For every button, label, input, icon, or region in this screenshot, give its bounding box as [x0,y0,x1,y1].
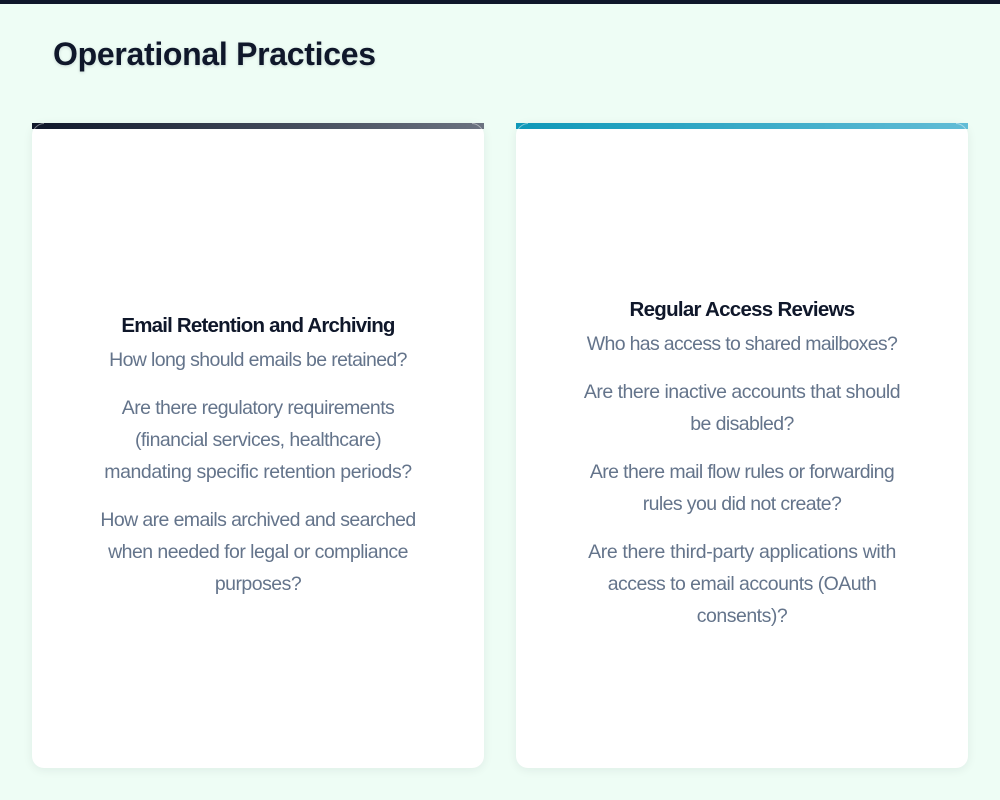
text: archiving question: purposes? [215,573,301,595]
text: regulatory question: mandating specific retention periods? [104,461,412,483]
text: archiving question: How are emails archived and searched [100,509,416,531]
text: inactive accounts question: be disabled? [690,413,794,435]
text: third-party applications question: Are there third-party applications with [588,541,896,563]
panel: regular access reviews [516,123,968,768]
text: archiving question: when needed for legal or compliance [108,541,408,563]
text: mail flow rules question [590,461,894,515]
text: regulatory question: (financial services, healthcare) [135,429,381,451]
text: archiving question [100,509,416,595]
panel accent bar: dark gradient [32,123,484,129]
text: third-party applications question: consents)? [697,605,787,627]
top accent bar [0,0,1000,4]
panel: email retention and archiving [32,123,484,768]
text: inactive accounts question [584,381,900,435]
title: Operational Practices [53,36,376,72]
panel accent bar: teal gradient [516,123,968,129]
text: mail flow rules question: Are there mail flow rules or forwarding [590,461,894,483]
heading: email retention: Email Retention and Archiving [121,314,395,337]
text: mail flow rules question: rules you did not create? [643,493,841,515]
text: retention question: How long should emails be retained? [109,349,407,371]
heading: access reviews: Regular Access Reviews [630,298,854,321]
text: inactive accounts question: Are there inactive accounts that should [584,381,900,403]
text: third-party applications question: access to email accounts (OAuth [608,573,876,595]
text: third-party applications question [588,541,896,627]
text: regulatory question [104,397,412,483]
text: regulatory question: Are there regulatory requirements [122,397,394,419]
text: shared mailbox question: Who has access to shared mailboxes? [587,333,897,355]
